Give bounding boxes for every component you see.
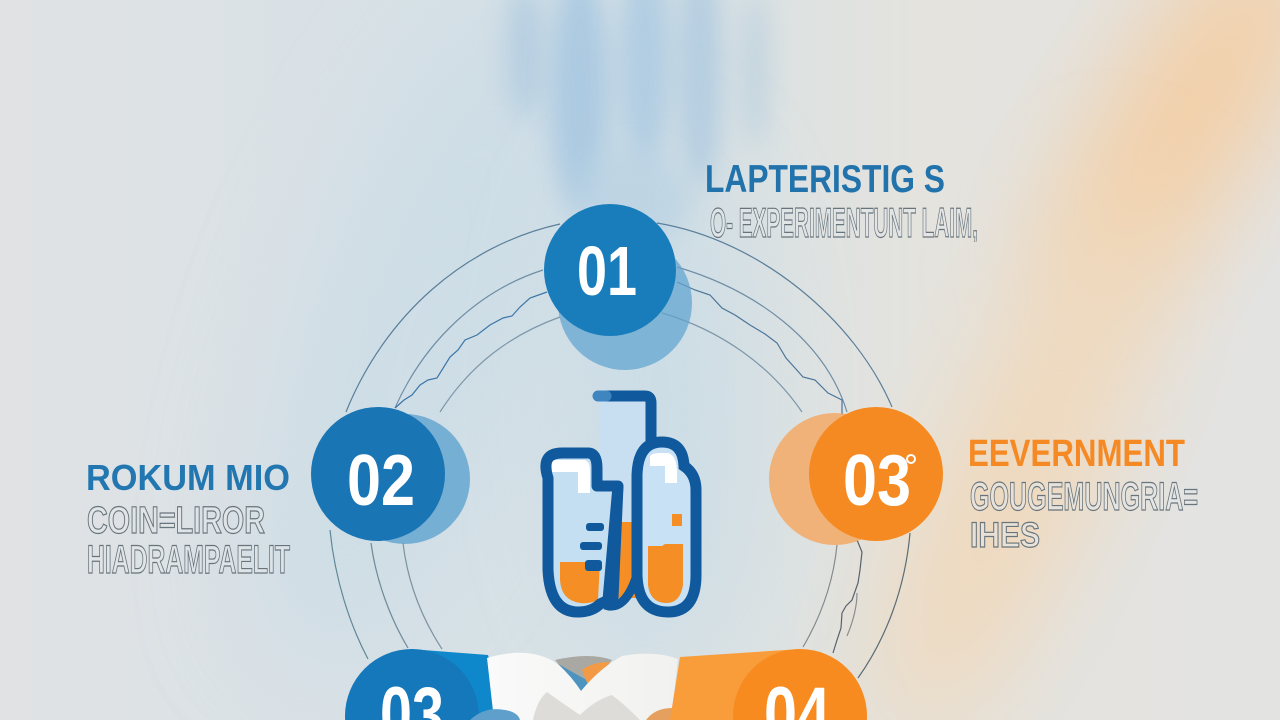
left tube bbox=[548, 453, 618, 612]
central test tubes icon bbox=[540, 390, 702, 618]
bottom step 04 orange bbox=[670, 649, 867, 720]
right tube bbox=[637, 442, 696, 612]
step 01: 01 bbox=[577, 232, 637, 310]
label: right description bbox=[970, 478, 1198, 552]
step 01 bbox=[544, 204, 692, 370]
step 03 orange bbox=[769, 407, 943, 545]
step 02 bbox=[311, 407, 470, 544]
back tube body bbox=[600, 400, 646, 600]
label: left description bbox=[87, 502, 290, 578]
bottom step 03 blue bbox=[345, 649, 493, 720]
step 03 orange: 03 bbox=[843, 441, 911, 521]
handshake shape bbox=[470, 652, 678, 720]
step 02: 02 bbox=[347, 441, 415, 521]
